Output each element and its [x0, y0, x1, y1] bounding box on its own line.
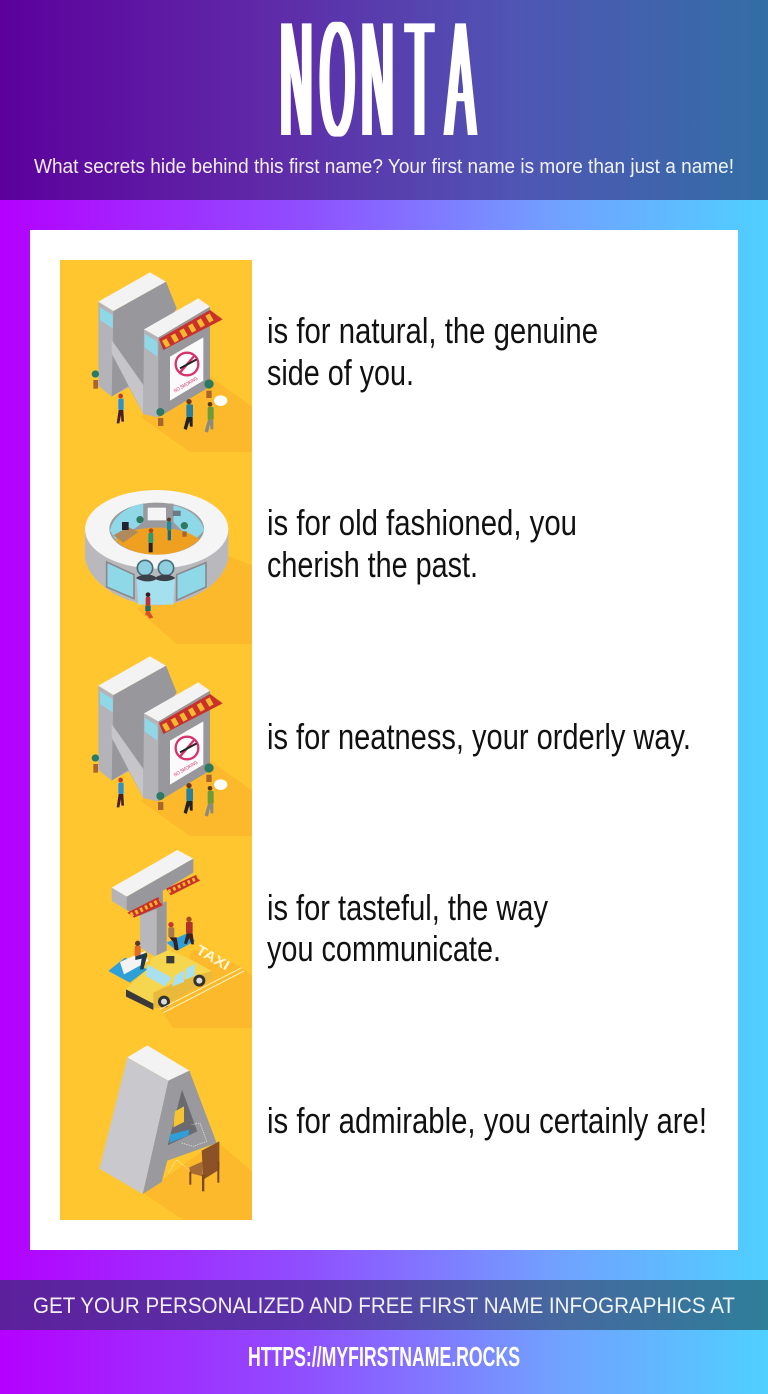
text: T tasteful: you communicate.	[267, 928, 501, 969]
taxi ground lettering: TAXI	[193, 941, 233, 973]
illustration: letter N shop with no smoking sign	[60, 260, 252, 452]
text: O old fashioned	[267, 502, 577, 585]
header band	[0, 0, 768, 200]
illustration: letter T taxi stand	[60, 836, 252, 1028]
illustration: second letter N shop	[60, 644, 252, 836]
text: N natural	[267, 310, 598, 393]
subtitle: What secrets hide behind this first name? Your first name is more than just a name!	[34, 156, 734, 178]
text: T tasteful	[267, 887, 548, 969]
white content panel	[30, 230, 738, 1250]
footer url: HTTPS://MYFIRSTNAME.ROCKS	[248, 1341, 520, 1372]
footer call-to-action band: GET YOUR PERSONALIZED AND FREE FIRST NAME INFOGRAPHICS AT	[33, 1293, 735, 1318]
illustration: letter A with chair	[60, 1028, 252, 1220]
text: N natural: is for natural, the genuine	[267, 310, 598, 351]
text: T tasteful: is for tasteful, the way	[267, 887, 548, 928]
text: O old fashioned: cherish the past.	[267, 544, 478, 585]
footer call-to-action band	[0, 1280, 768, 1330]
text: O old fashioned: is for old fashioned, you	[267, 502, 577, 543]
illustration: letter O optician ring	[60, 452, 252, 644]
text: N natural: side of you.	[267, 352, 414, 393]
